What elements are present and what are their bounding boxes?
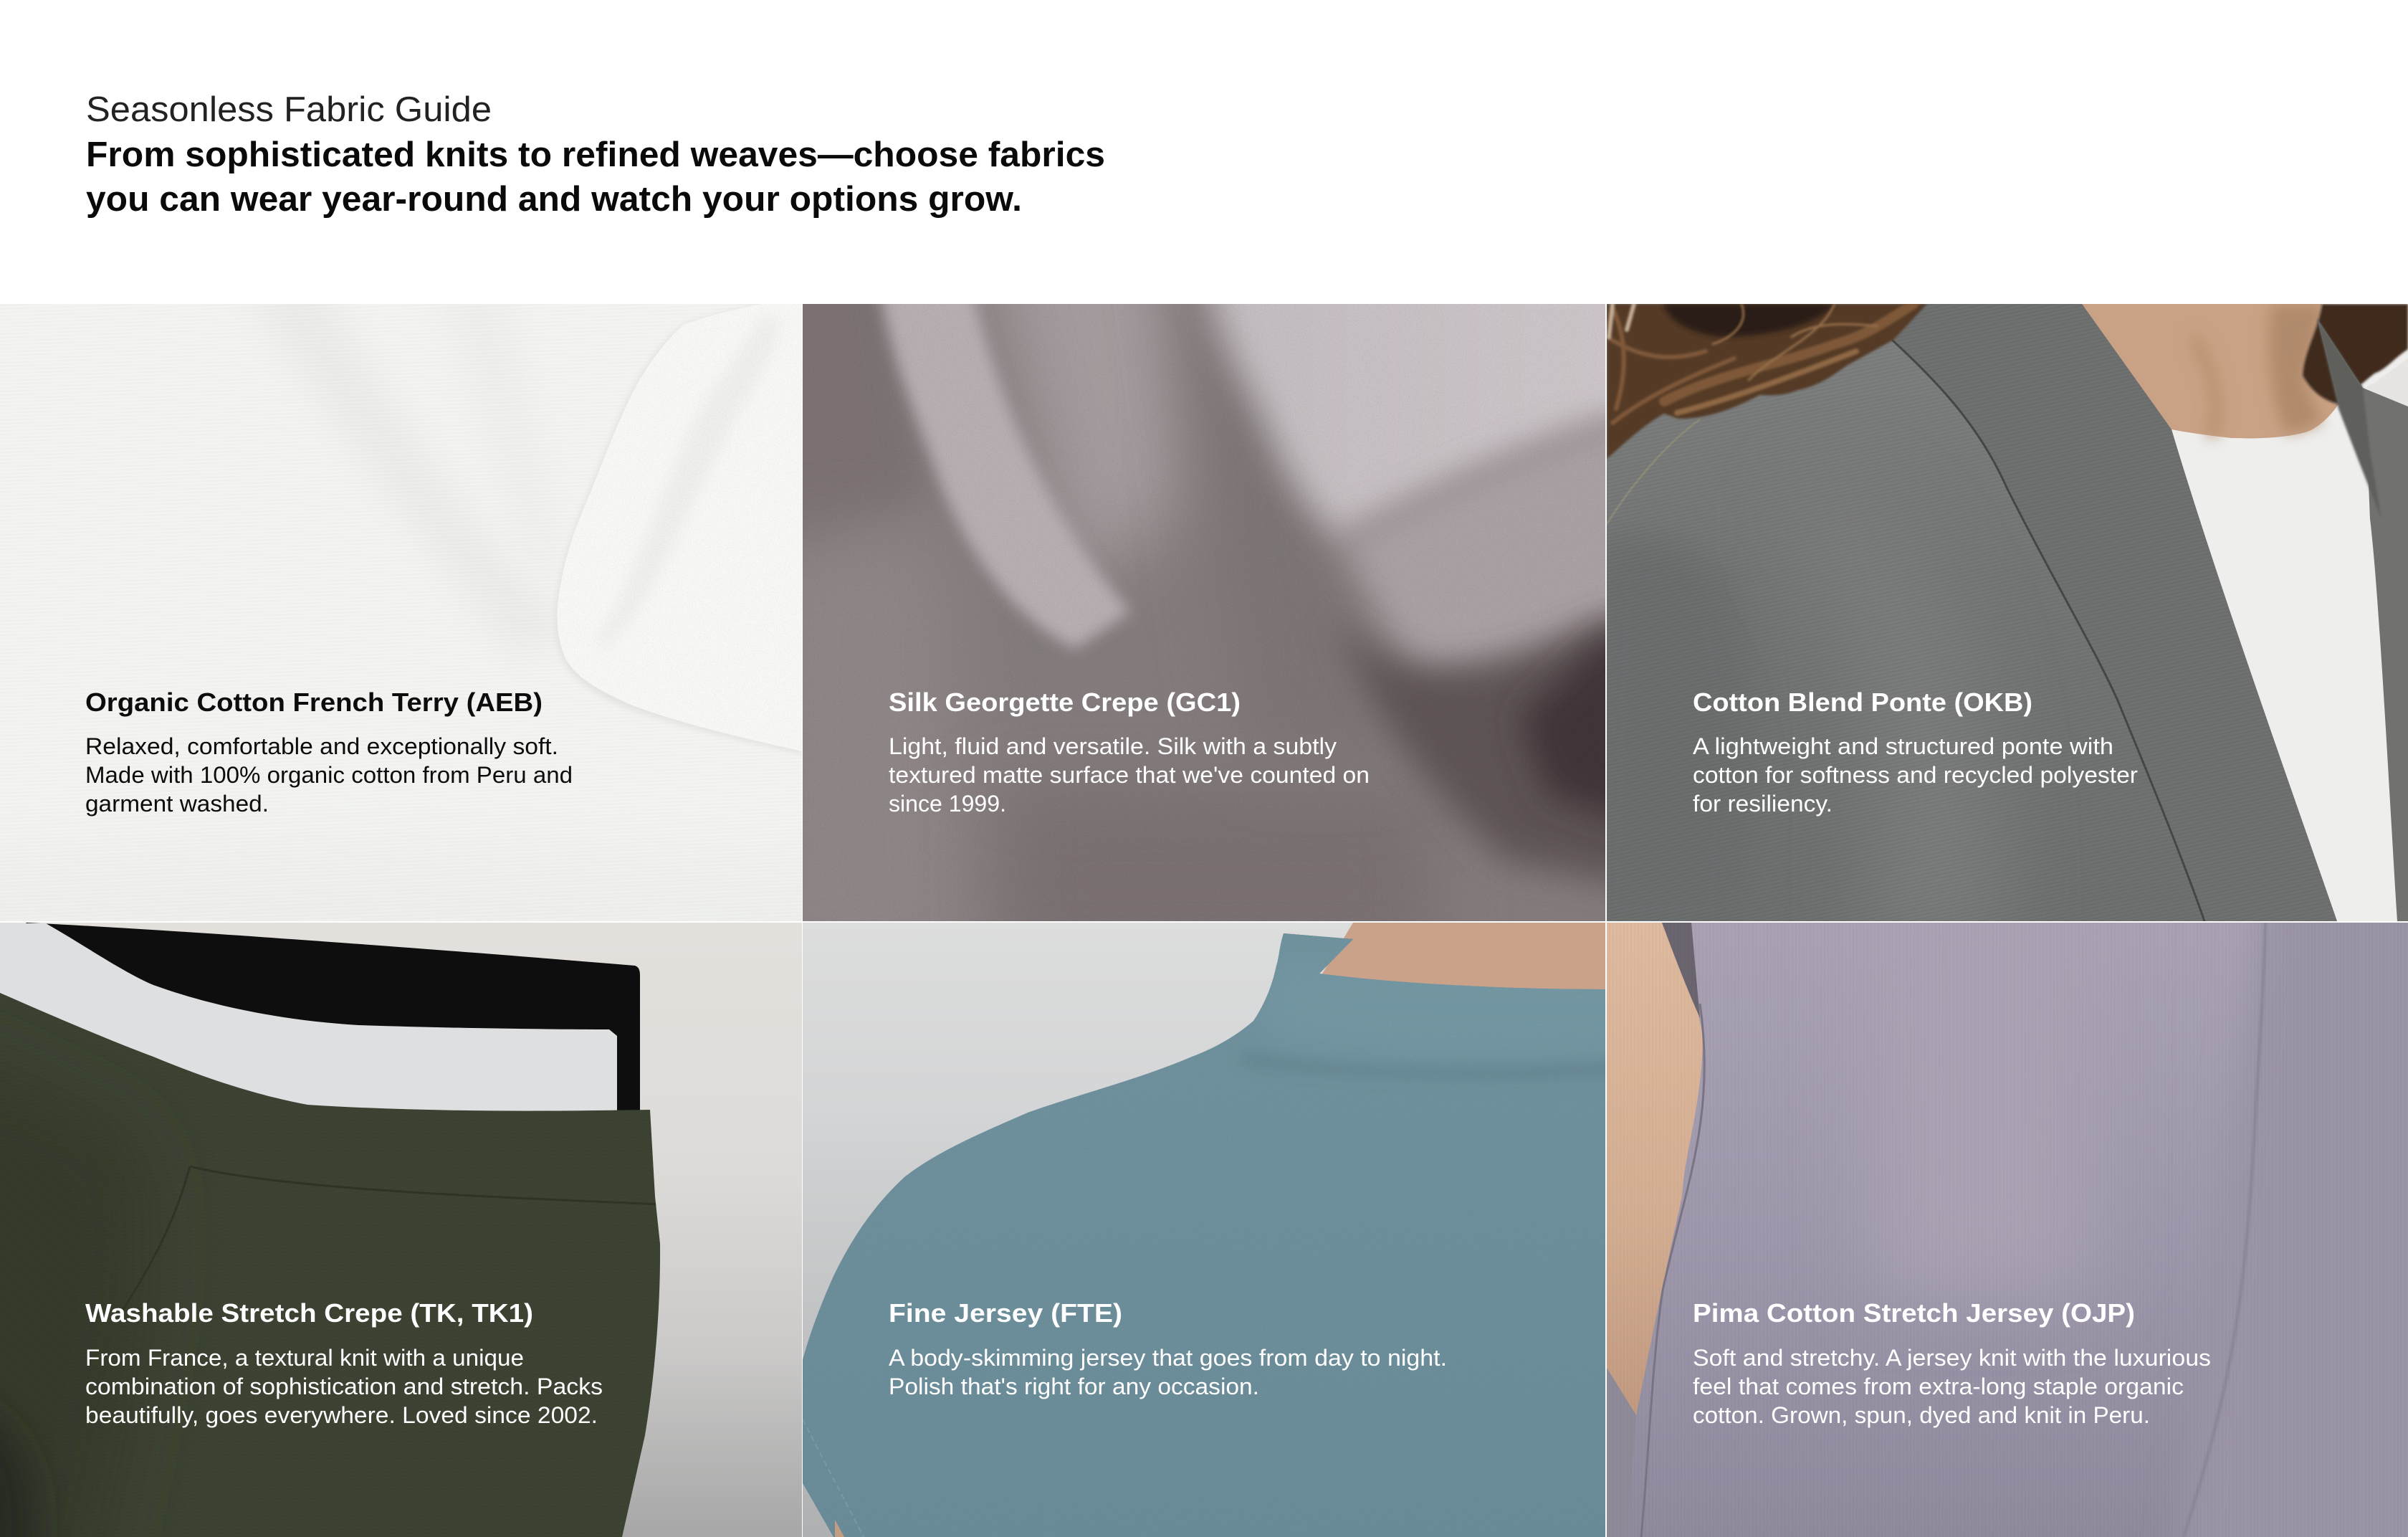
header: title and subtitle (86, 90, 1105, 219)
heading: Washable Stretch Crepe: Washable Stretch Crepe (TK, TK1) (85, 1298, 533, 1328)
photo: teal mock-neck jersey tee (803, 923, 1648, 1537)
description (889, 733, 1370, 817)
panel: Silk Georgette Crepe (803, 304, 1605, 921)
description (85, 1345, 603, 1428)
panel: Organic Cotton French Terry (0, 304, 802, 921)
description: combination of sophistication and stretch. Packs (85, 1374, 603, 1399)
heading: Pima Cotton Stretch Jersey: Pima Cotton Stretch Jersey (OJP) (1693, 1298, 2135, 1328)
description (85, 733, 573, 817)
header: title and subtitle: From sophisticated knits to refined weaves—choose fabrics (86, 135, 1105, 174)
heading: Cotton Blend Ponte: Cotton Blend Ponte (OKB) (1693, 687, 2032, 717)
photo: grey ponte cardigan over white tee (1577, 304, 2408, 946)
description: Light, fluid and versatile. Silk with a subtly (889, 733, 1337, 759)
panel: Pima Cotton Stretch Jersey (1607, 860, 2408, 1537)
hair (1607, 304, 1927, 459)
description: Relaxed, comfortable and exceptionally soft. (85, 733, 558, 759)
photo: white french terry fabric (0, 304, 802, 921)
photo: lavender jersey pants with pocket (1607, 860, 2408, 1537)
description (1693, 1345, 2211, 1428)
description: Polish that's right for any occasion. (889, 1374, 1259, 1399)
description: A body-skimming jersey that goes from day to night. (889, 1345, 1447, 1371)
description: cotton for softness and recycled polyester (1693, 762, 2138, 788)
description: Made with 100% organic cotton from Peru and (85, 762, 573, 788)
panel: Fine Jersey (803, 923, 1648, 1537)
panel: Washable Stretch Crepe (0, 923, 802, 1537)
photo: draped mauve silk (803, 304, 1605, 921)
description: textured matte surface that we've counted on (889, 762, 1370, 788)
description: From France, a textural knit with a unique (85, 1345, 524, 1371)
description: A lightweight and structured ponte with (1693, 733, 2113, 759)
heading: Fine Jersey: Fine Jersey (FTE) (889, 1298, 1122, 1328)
panel: Cotton Blend Ponte (1577, 304, 2408, 946)
description: since 1999. (889, 791, 1006, 817)
heading: Silk Georgette Crepe: Silk Georgette Crepe (GC1) (889, 687, 1241, 717)
description: garment washed. (85, 791, 269, 817)
header: title and subtitle: you can wear year-round and watch your options grow. (86, 180, 1022, 219)
heading: Organic Cotton French Terry: Organic Cotton French Terry (AEB) (85, 687, 543, 717)
photo: folded olive, white and black pants (0, 923, 802, 1537)
description: cotton. Grown, spun, dyed and knit in Peru. (1693, 1402, 2150, 1428)
description (1693, 733, 2138, 817)
description: for resiliency. (1693, 791, 1833, 817)
description: beautifully, goes everywhere. Loved since 2002. (85, 1402, 598, 1428)
header: title and subtitle: Seasonless Fabric Guide (86, 90, 492, 129)
description: feel that comes from extra-long staple organic (1693, 1374, 2184, 1399)
description: Soft and stretchy. A jersey knit with the luxurious (1693, 1345, 2211, 1371)
description (889, 1345, 1447, 1399)
